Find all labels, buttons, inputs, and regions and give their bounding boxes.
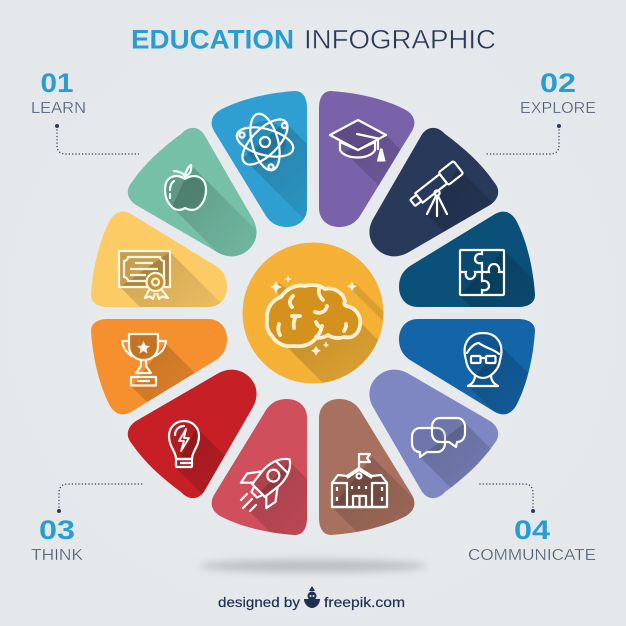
- icon: telescope: [408, 161, 463, 216]
- label: 02 explore: [520, 68, 596, 117]
- label: 04 communicate: COMMUNICATE: [468, 547, 596, 564]
- label: 01 learn: LEARN: [31, 100, 86, 117]
- connector: 03: [57, 484, 144, 513]
- label: 04 communicate: [468, 515, 596, 564]
- icon: freepik logo: [304, 586, 320, 608]
- icon: trophy: [122, 334, 166, 386]
- panel: puzzle petal: [399, 212, 535, 307]
- connector: 02: [485, 124, 561, 154]
- panel: light bulb petal: [128, 370, 257, 498]
- panel: school petal: [319, 399, 414, 535]
- title: EDUCATION: [131, 24, 294, 54]
- footer credit: freepik.com: [324, 594, 405, 610]
- panel: graduation cap petal: [319, 91, 414, 227]
- label: 02 explore: EXPLORE: [520, 100, 596, 117]
- footer credit: designed by: [218, 594, 300, 610]
- icon: school building: [332, 453, 387, 507]
- icon: light bulb: [169, 421, 199, 467]
- panel: apple petal: [128, 128, 257, 256]
- label: 01 learn: 01: [40, 68, 74, 98]
- connector: 01: [55, 124, 139, 154]
- icon: speech bubbles: [412, 418, 465, 457]
- icon: graduation cap: [330, 120, 386, 161]
- icon: sparkles: [270, 275, 357, 356]
- ground shadow: [199, 560, 427, 572]
- icon: brain: [267, 285, 360, 346]
- panel: trophy petal: [91, 319, 227, 414]
- panel: telescope petal: [369, 128, 498, 256]
- panel: certificate petal: [91, 212, 227, 307]
- label: 03 think: THINK: [31, 547, 83, 564]
- panel: rocket petal: [212, 399, 307, 535]
- label: 04 communicate: 04: [514, 515, 550, 545]
- icon: rocket: [239, 445, 304, 511]
- panel: face petal: [399, 319, 535, 414]
- label: 02 explore: 02: [540, 68, 576, 98]
- icon: puzzle: [460, 250, 504, 295]
- center circle: brain: [242, 242, 384, 384]
- footer credit: [218, 586, 405, 610]
- panel: speech bubbles petal: [369, 370, 498, 498]
- icon: certificate: [119, 251, 170, 299]
- connector: 04: [478, 484, 535, 513]
- title: INFOGRAPHIC: [304, 24, 496, 54]
- icon: apple: [165, 165, 206, 210]
- icon: person with glasses: [465, 333, 501, 386]
- label: 03 think: 03: [39, 515, 75, 545]
- label: 01 learn: [31, 68, 86, 117]
- title: [131, 24, 496, 54]
- label: 03 think: [31, 515, 83, 564]
- icon: atom: [234, 111, 296, 173]
- panel: atom petal: [212, 91, 307, 227]
